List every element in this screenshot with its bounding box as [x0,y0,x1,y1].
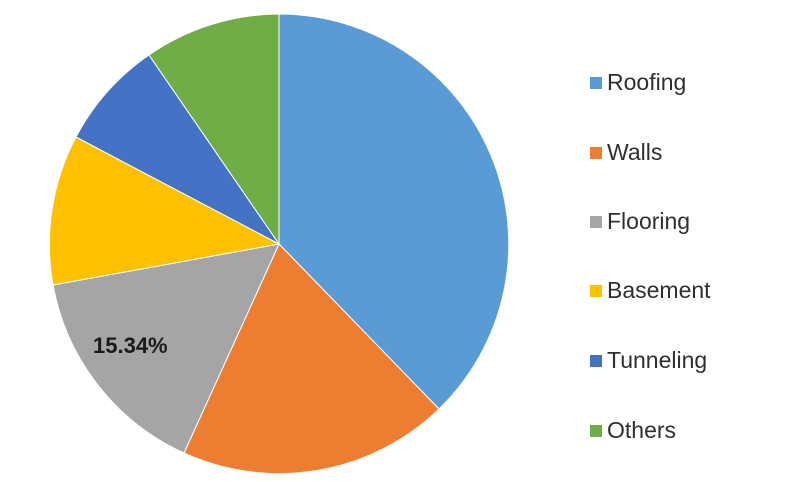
pie chart [49,14,509,474]
slice: Tunneling [76,55,279,244]
legend item: Others: Others [607,417,676,443]
legend item: Roofing: Roofing [607,69,686,95]
legend item: Flooring: Flooring [607,208,690,234]
slice: Basement [49,137,279,285]
slice: Roofing [279,14,509,409]
legend [590,69,711,443]
slice: Flooring [53,244,279,453]
slice: Others [149,14,279,244]
legend item: Walls: Walls [607,139,662,165]
data label: Flooring share: 15.34% [93,333,168,358]
legend item: Tunneling: Tunneling [607,347,707,373]
slice: Walls [184,244,439,474]
legend item: Basement: Basement [607,277,711,303]
